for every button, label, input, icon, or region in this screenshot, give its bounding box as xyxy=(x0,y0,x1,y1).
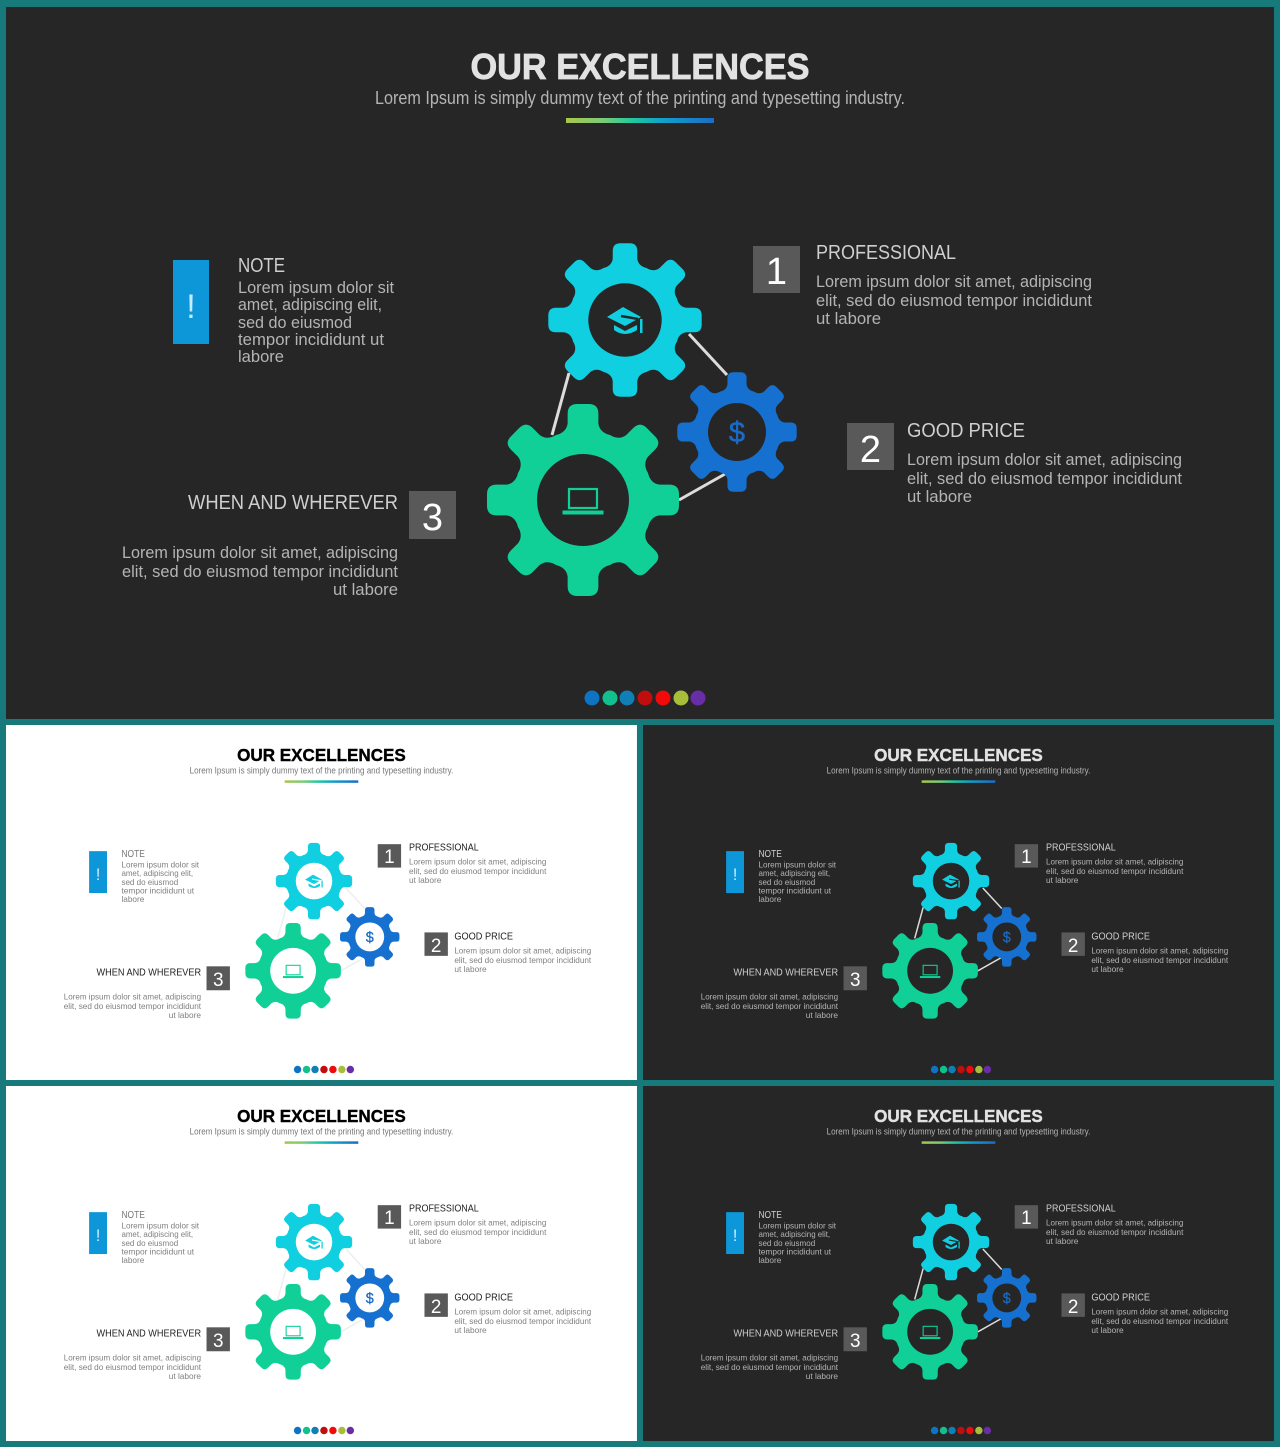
gradient underline xyxy=(922,780,995,783)
body: ut labore xyxy=(169,1011,201,1020)
icon: laptop xyxy=(920,1326,940,1339)
heading: GOOD PRICE xyxy=(454,1292,513,1303)
gear: laptop xyxy=(487,404,679,596)
body: Lorem ipsum dolor sit amet, adipiscing xyxy=(122,544,398,562)
heading: PROFESSIONAL xyxy=(409,843,479,854)
note text: Lorem ipsum dolor sit xyxy=(758,861,837,870)
note text: tempor incididunt ut xyxy=(758,1248,832,1257)
note text xyxy=(121,1222,200,1265)
body: Lorem ipsum dolor sit amet, adipiscing xyxy=(907,451,1182,469)
heading: WHEN AND WHEREVER xyxy=(97,1328,201,1339)
item 3 xyxy=(64,966,230,1020)
note text: tempor incididunt ut xyxy=(758,887,832,896)
note icon: ! xyxy=(733,1226,737,1245)
heading: GOOD PRICE xyxy=(1091,1292,1150,1303)
note heading: NOTE xyxy=(121,849,145,860)
note block xyxy=(89,1210,200,1265)
number box 1 xyxy=(378,1205,401,1229)
body: ut labore xyxy=(1091,1326,1124,1335)
connector lines xyxy=(278,888,365,971)
body: elit, sed do eiusmod tempor incididunt xyxy=(701,1363,839,1372)
note heading: NOTE xyxy=(238,255,285,277)
icon: dollar: $ xyxy=(1003,1291,1011,1307)
item 2 xyxy=(424,1292,592,1335)
heading: WHEN AND WHEREVER xyxy=(734,967,838,978)
body: elit, sed do eiusmod tempor incididunt xyxy=(907,470,1182,488)
note text: Lorem ipsum dolor sit xyxy=(238,279,394,297)
number box 1: 1 xyxy=(384,847,395,868)
body: elit, sed do eiusmod tempor incididunt xyxy=(1046,1228,1184,1237)
number box 1 xyxy=(753,246,800,293)
item 1 xyxy=(378,1204,547,1246)
note block xyxy=(726,1210,837,1265)
number box 3: 3 xyxy=(213,1331,223,1352)
pagination dots xyxy=(294,1427,354,1434)
pagination dots xyxy=(931,1066,991,1073)
number box 3 xyxy=(844,1327,867,1352)
heading: PROFESSIONAL xyxy=(1046,1204,1116,1215)
note text: amet, adipiscing elit, xyxy=(121,869,193,878)
body: elit, sed do eiusmod tempor incididunt xyxy=(122,563,398,581)
gear: price xyxy=(340,907,399,967)
body: Lorem ipsum dolor sit amet, adipiscing xyxy=(64,993,201,1002)
number box 1: 1 xyxy=(384,1208,395,1229)
gear: price xyxy=(977,907,1036,967)
slide: small light, row 1 xyxy=(6,725,637,1080)
pagination dots xyxy=(294,1066,354,1073)
heading: PROFESSIONAL xyxy=(816,242,956,264)
number box 3 xyxy=(207,966,230,991)
note text: labore xyxy=(758,895,782,904)
body xyxy=(1091,1307,1229,1335)
connector lines xyxy=(552,334,727,543)
gradient underline xyxy=(285,1141,358,1144)
body: Lorem ipsum dolor sit amet, adipiscing xyxy=(816,273,1092,291)
item 2 xyxy=(424,931,592,974)
body: Lorem ipsum dolor sit amet, adipiscing xyxy=(701,993,838,1002)
note heading: NOTE xyxy=(121,1210,145,1221)
body: Lorem ipsum dolor sit amet, adipiscing xyxy=(64,1354,201,1363)
gradient underline xyxy=(285,780,358,783)
body: ut labore xyxy=(1046,876,1079,885)
number box 3 xyxy=(207,1327,230,1352)
gear: laptop xyxy=(882,1284,978,1380)
heading: WHEN AND WHEREVER xyxy=(188,492,398,514)
title: OUR EXCELLENCES xyxy=(874,1106,1043,1126)
body xyxy=(1091,946,1229,974)
body xyxy=(454,1307,592,1335)
number box 2 xyxy=(424,932,448,957)
note text: amet, adipiscing elit, xyxy=(121,1230,193,1239)
gear: education xyxy=(276,843,352,919)
slide: small light, row 2 xyxy=(6,1086,637,1441)
body: ut labore xyxy=(454,965,487,974)
body xyxy=(907,451,1182,506)
gear: laptop xyxy=(245,1284,341,1380)
number box 1 xyxy=(1015,844,1038,868)
number box 2: 2 xyxy=(1068,1297,1078,1318)
item 1 xyxy=(378,843,547,885)
icon: laptop xyxy=(562,489,604,514)
number box 1 xyxy=(1015,1205,1038,1229)
body: elit, sed do eiusmod tempor incididunt xyxy=(1046,867,1184,876)
icon: dollar: $ xyxy=(729,417,745,449)
gear: price xyxy=(340,1268,399,1328)
title: OUR EXCELLENCES xyxy=(470,46,810,87)
gear: education xyxy=(548,243,702,397)
body xyxy=(122,544,398,599)
body: Lorem ipsum dolor sit amet, adipiscing xyxy=(1046,1219,1184,1228)
number box 2: 2 xyxy=(431,1297,441,1318)
note text: sed do eiusmod xyxy=(121,878,179,887)
item 1 xyxy=(1015,843,1184,885)
body: elit, sed do eiusmod tempor incididunt xyxy=(816,292,1092,310)
note icon: ! xyxy=(96,865,100,884)
note text: Lorem ipsum dolor sit xyxy=(121,861,200,870)
subtitle: Lorem Ipsum is simply dummy text of the printing and typesetting industry. xyxy=(827,765,1090,775)
number box 2: 2 xyxy=(431,936,441,957)
body: ut labore xyxy=(806,1372,838,1381)
body: Lorem ipsum dolor sit amet, adipiscing xyxy=(1046,858,1184,867)
pagination dots xyxy=(931,1427,991,1434)
title: OUR EXCELLENCES xyxy=(237,1106,406,1126)
number box 3: 3 xyxy=(850,970,860,991)
slide: large dark xyxy=(6,7,1274,719)
item 1 xyxy=(1015,1204,1184,1246)
body: Lorem ipsum dolor sit amet, adipiscing xyxy=(1091,946,1229,955)
body: ut labore xyxy=(169,1372,201,1381)
note text xyxy=(758,861,837,904)
icon: laptop xyxy=(283,1326,303,1339)
body: ut labore xyxy=(409,1237,442,1246)
note block xyxy=(173,255,394,366)
note text: Lorem ipsum dolor sit xyxy=(121,1222,200,1231)
heading: GOOD PRICE xyxy=(1091,931,1150,942)
title: OUR EXCELLENCES xyxy=(874,745,1043,765)
gear: laptop xyxy=(245,923,341,1019)
body: elit, sed do eiusmod tempor incididunt xyxy=(409,867,547,876)
heading: WHEN AND WHEREVER xyxy=(734,1328,838,1339)
note text: tempor incididunt ut xyxy=(121,1248,195,1257)
body: Lorem ipsum dolor sit amet, adipiscing xyxy=(409,858,547,867)
body xyxy=(1046,1219,1184,1246)
number box 2 xyxy=(1061,932,1085,957)
number box 1: 1 xyxy=(1021,847,1032,868)
body: elit, sed do eiusmod tempor incididunt xyxy=(64,1363,202,1372)
note text: tempor incididunt ut xyxy=(121,887,195,896)
body xyxy=(701,1354,839,1381)
icon: graduation cap xyxy=(942,1236,960,1249)
body: elit, sed do eiusmod tempor incididunt xyxy=(409,1228,547,1237)
icon: graduation cap xyxy=(305,1236,323,1249)
subtitle: Lorem Ipsum is simply dummy text of the printing and typesetting industry. xyxy=(190,765,453,775)
note text: amet, adipiscing elit, xyxy=(758,869,830,878)
note text: labore xyxy=(121,895,145,904)
note text xyxy=(238,279,394,366)
note text: amet, adipiscing elit, xyxy=(238,296,382,314)
gear: education xyxy=(913,843,989,919)
slide: small dark, row 2 xyxy=(643,1086,1274,1441)
number box 2: 2 xyxy=(1068,936,1078,957)
body: ut labore xyxy=(333,581,398,599)
note text: sed do eiusmod xyxy=(121,1239,179,1248)
icon: laptop xyxy=(920,965,940,978)
note icon: ! xyxy=(96,1226,100,1245)
body: Lorem ipsum dolor sit amet, adipiscing xyxy=(1091,1307,1229,1316)
note icon: ! xyxy=(186,288,196,326)
gear: education xyxy=(276,1204,352,1280)
item 3 xyxy=(701,1327,867,1381)
item 3 xyxy=(701,966,867,1020)
number box 2: 2 xyxy=(860,429,881,471)
heading: PROFESSIONAL xyxy=(409,1204,479,1215)
connector lines xyxy=(278,1249,365,1332)
body: ut labore xyxy=(907,488,972,506)
number box 3: 3 xyxy=(213,970,223,991)
note text: sed do eiusmod xyxy=(758,1239,816,1248)
note icon: ! xyxy=(733,865,737,884)
icon: dollar: $ xyxy=(366,1291,374,1307)
note text: sed do eiusmod xyxy=(238,314,352,332)
heading: GOOD PRICE xyxy=(454,931,513,942)
gear: laptop xyxy=(882,923,978,1019)
body: ut labore xyxy=(409,876,442,885)
note heading: NOTE xyxy=(758,1210,782,1221)
body: elit, sed do eiusmod tempor incididunt xyxy=(454,1317,592,1326)
body: elit, sed do eiusmod tempor incididunt xyxy=(454,956,592,965)
connector lines xyxy=(915,1249,1002,1332)
body: elit, sed do eiusmod tempor incididunt xyxy=(1091,1317,1229,1326)
icon: graduation cap xyxy=(305,875,323,888)
body: ut labore xyxy=(1046,1237,1079,1246)
note text: labore xyxy=(121,1256,145,1265)
icon: dollar: $ xyxy=(366,930,374,946)
note heading: NOTE xyxy=(758,849,782,860)
icon: graduation cap xyxy=(942,875,960,888)
item 3 xyxy=(64,1327,230,1381)
gear: price xyxy=(677,372,797,492)
subtitle: Lorem Ipsum is simply dummy text of the printing and typesetting industry. xyxy=(827,1126,1090,1136)
note icon xyxy=(173,260,209,344)
note block xyxy=(89,849,200,904)
pagination dots xyxy=(584,690,706,706)
icon: dollar: $ xyxy=(1003,930,1011,946)
connector lines xyxy=(915,888,1002,971)
body xyxy=(64,993,202,1020)
body: Lorem ipsum dolor sit amet, adipiscing xyxy=(454,1307,592,1316)
heading: WHEN AND WHEREVER xyxy=(97,967,201,978)
title: OUR EXCELLENCES xyxy=(237,745,406,765)
note text: Lorem ipsum dolor sit xyxy=(758,1222,837,1231)
note text: labore xyxy=(238,348,284,366)
gradient underline xyxy=(566,118,714,123)
body xyxy=(816,273,1092,328)
note text xyxy=(121,861,200,904)
body: ut labore xyxy=(806,1011,838,1020)
number box 3 xyxy=(409,491,456,539)
icon: laptop xyxy=(283,965,303,978)
number box 3: 3 xyxy=(422,497,443,539)
number box 3: 3 xyxy=(850,1331,860,1352)
number box 1 xyxy=(378,844,401,868)
body: elit, sed do eiusmod tempor incididunt xyxy=(64,1002,202,1011)
number box 3 xyxy=(844,966,867,991)
note text xyxy=(758,1222,837,1265)
body: Lorem ipsum dolor sit amet, adipiscing xyxy=(701,1354,838,1363)
body: ut labore xyxy=(454,1326,487,1335)
subtitle: Lorem Ipsum is simply dummy text of the printing and typesetting industry. xyxy=(375,88,905,108)
gear: price xyxy=(977,1268,1036,1328)
note text: labore xyxy=(758,1256,782,1265)
body xyxy=(1046,858,1184,885)
body: ut labore xyxy=(1091,965,1124,974)
item 2 xyxy=(847,420,1182,506)
gear: education xyxy=(913,1204,989,1280)
heading: PROFESSIONAL xyxy=(1046,843,1116,854)
number box 2 xyxy=(424,1293,448,1318)
body xyxy=(701,993,839,1020)
note text: amet, adipiscing elit, xyxy=(758,1230,830,1239)
item 1 xyxy=(753,242,1092,328)
body: Lorem ipsum dolor sit amet, adipiscing xyxy=(409,1219,547,1228)
note text: tempor incididunt ut xyxy=(238,331,384,349)
body xyxy=(454,946,592,974)
note block xyxy=(726,849,837,904)
number box 2 xyxy=(1061,1293,1085,1318)
item 2 xyxy=(1061,1292,1229,1335)
gradient underline xyxy=(922,1141,995,1144)
note text: sed do eiusmod xyxy=(758,878,816,887)
number box 1: 1 xyxy=(766,251,787,293)
slide: small dark, row 1 xyxy=(643,725,1274,1080)
body: elit, sed do eiusmod tempor incididunt xyxy=(1091,956,1229,965)
body xyxy=(64,1354,202,1381)
body: elit, sed do eiusmod tempor incididunt xyxy=(701,1002,839,1011)
item 3 xyxy=(122,491,456,599)
body xyxy=(409,1219,547,1246)
body: Lorem ipsum dolor sit amet, adipiscing xyxy=(454,946,592,955)
heading: GOOD PRICE xyxy=(907,420,1025,442)
body: ut labore xyxy=(816,310,881,328)
item 2 xyxy=(1061,931,1229,974)
number box 1: 1 xyxy=(1021,1208,1032,1229)
icon: graduation cap xyxy=(607,307,642,334)
subtitle: Lorem Ipsum is simply dummy text of the printing and typesetting industry. xyxy=(190,1126,453,1136)
number box 2 xyxy=(847,423,894,471)
body xyxy=(409,858,547,885)
